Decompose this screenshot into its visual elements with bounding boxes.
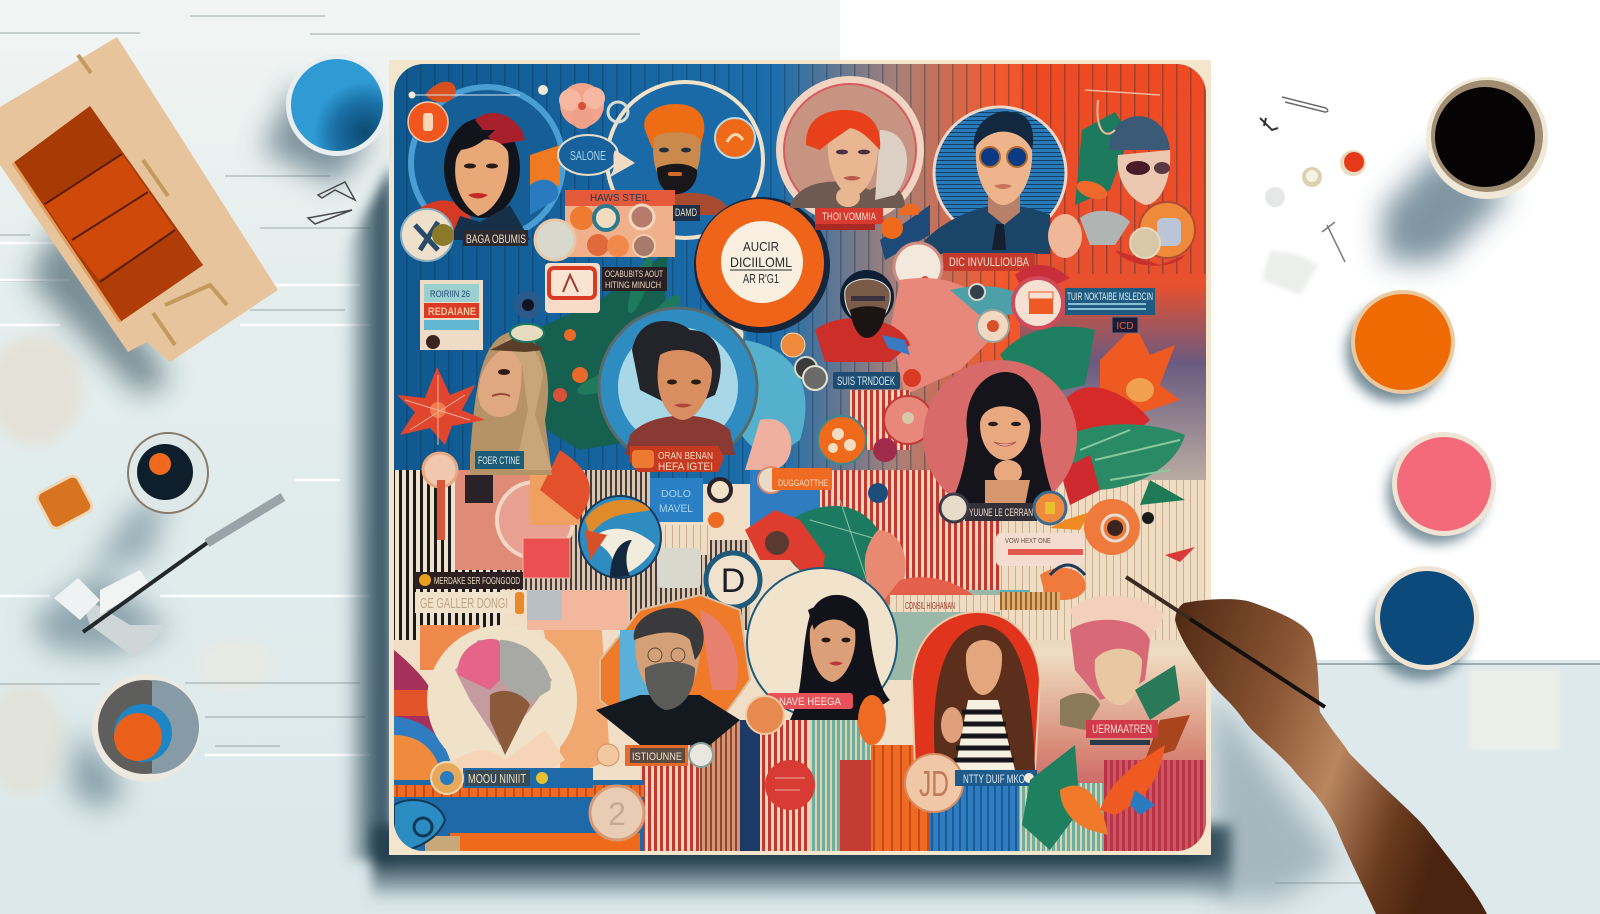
label: DAMD: DAMD (675, 207, 697, 219)
knob with orange dial (70, 674, 200, 810)
orange paint pot (1346, 290, 1455, 402)
magazine page left: ROIRIIN 26 (430, 289, 470, 299)
plate (894, 243, 942, 291)
palette tray (0, 37, 278, 395)
badge: central orange title: DICIILOML (730, 254, 792, 270)
decorative top-left sketch (408, 82, 628, 122)
portrait: pink-haired figure with feathers (1060, 596, 1190, 760)
label: ISTIOUNNE (597, 743, 713, 767)
lower-left retro bands (394, 600, 644, 851)
panel: salmon badges (535, 190, 675, 260)
label: FOER CTINE (423, 451, 524, 540)
ring pot with orange dot (90, 433, 208, 570)
panel: small orange icons (890, 565, 1086, 612)
label: ISTIOUNNE: ISTIOUNNE (632, 751, 682, 763)
label: ORAN BENAN (630, 446, 724, 473)
tool with long brush (30, 497, 283, 658)
abstract tiles and collage: DOLO (661, 489, 691, 500)
label: ORAN BENAN: ORAN BENAN (658, 451, 713, 462)
magazine page left: REDAIANE (428, 306, 476, 318)
medallion right (1115, 202, 1195, 266)
label: THOI VOMMIA: THOI VOMMIA (822, 211, 876, 223)
icon: orange badge near hat (715, 118, 755, 158)
label: BAGA OBUMIS: BAGA OBUMIS (466, 232, 526, 246)
label: MOOU NINIIT (431, 762, 593, 794)
badge: central orange title: AR R'G1 (743, 271, 779, 286)
magazine page left (420, 280, 483, 350)
red flower left (397, 367, 485, 445)
label: THOI VOMMIA (815, 208, 883, 230)
red bloom centre (745, 483, 985, 605)
label: FOER CTINE: FOER CTINE (478, 455, 520, 467)
label: TUIR NOKTAIBE MSLEDCIN: ICD (1116, 321, 1134, 332)
abstract tiles and collage: MAVEL (659, 503, 693, 515)
label: TUIR NOKTAIBE MSLEDCIN: TUIR NOKTAIBE MSLEDCIN (1067, 291, 1153, 303)
portrait: elderly person with flower hair (427, 625, 577, 775)
portrait: young person with curly hair (599, 308, 757, 466)
label: orange tag centre (758, 467, 832, 493)
orange blob with eye (1050, 499, 1195, 562)
speech bubble: SALONE (558, 135, 635, 180)
coin: red seal (765, 760, 815, 810)
poster drop shadows (345, 165, 1340, 903)
label: TUIR NOKTAIBE MSLEDCIN (1065, 288, 1155, 333)
label: DAMD (673, 205, 700, 221)
hand holding brush (1126, 577, 1487, 914)
panel: MERDAKE label stack (415, 572, 524, 614)
portrait: woman with dark hair on cream (747, 568, 897, 720)
icon: pink flower (559, 83, 605, 129)
speech bubble: SALONE: SALONE (570, 148, 606, 163)
panel: MERDAKE label stack: GE GALLER DONGI (420, 595, 508, 612)
panel: MERDAKE label stack: MERDAKE SER FOGNGOOD (434, 576, 520, 587)
portrait: woman with red headband (411, 87, 563, 240)
salmon texture middle right (850, 278, 1030, 462)
icon: orange badge top-left (408, 102, 448, 142)
label: UERMAATREN: UERMAATREN (1092, 722, 1152, 736)
badge: central orange title (694, 197, 830, 333)
icon: folder badge (1013, 265, 1070, 328)
label: OCABUBITS AOUT: HITING MINUCH (605, 280, 661, 290)
label: YUUNE LE CERRAN (940, 492, 1066, 524)
label: orange tag centre: DUGGAOTTHE (778, 478, 828, 488)
portrait: man with round sunglasses (922, 107, 1082, 258)
paint brush (1126, 577, 1325, 707)
small red and white pots with clips (1260, 97, 1366, 295)
icon: left scissors badge (401, 209, 454, 261)
label: input card (996, 533, 1084, 566)
portrait: red-haired person (776, 76, 924, 224)
label: OCABUBITS AOUT: OCABUBITS AOUT (605, 269, 663, 279)
label: NAVE HEEGA: NAVE HEEGA (779, 696, 842, 708)
portrait: man with orange hat (607, 82, 763, 238)
pink paint pot (1387, 432, 1496, 544)
icon: letter D badge (706, 553, 760, 607)
coin: number 2: 2 (608, 796, 626, 832)
green foliage centre (530, 250, 890, 590)
panel: small orange icons: CONSIL HIGHANAN (905, 601, 955, 612)
coin: initials: JD (919, 763, 949, 804)
navy paint pot (1370, 566, 1479, 680)
portrait: bearded man with glasses (596, 595, 750, 745)
icon: orange cluster badge (818, 416, 866, 464)
badge: central orange title: AUCIR (743, 239, 779, 254)
label: YUUNE LE CERRAN: YUUNE LE CERRAN (969, 507, 1033, 519)
label: DIC INVULLIOUBA (943, 253, 1035, 271)
portrait: man with black beanie (815, 270, 910, 362)
label: BAGA OBUMIS (463, 230, 528, 246)
label: ORAN BENAN: HEFA IGTEI (658, 461, 713, 473)
small orange paint square (35, 474, 94, 531)
portrait: person with cap and foliage (1074, 90, 1170, 245)
label: UERMAATREN (1086, 720, 1158, 745)
teal wave left of centre (726, 322, 818, 470)
label: MOOU NINIIT: MOOU NINIIT (468, 771, 526, 786)
poster (389, 60, 1211, 855)
portrait: woman in striped shirt on red arch (912, 612, 1040, 770)
label: SUIS TRNDOEK (803, 366, 921, 390)
label: NTTY DUIF MKO: NTTY DUIF MKO (963, 772, 1025, 786)
icon: red play card (545, 263, 600, 313)
coin: number 2 (590, 786, 644, 840)
portrait: smiling woman with dark hair (923, 360, 1077, 514)
label: DIC INVULLIOUBA: DIC INVULLIOUBA (949, 255, 1029, 269)
icon: letter D badge: D (721, 562, 745, 600)
label: NAVE HEEGA (746, 693, 886, 745)
orange fruit accent (880, 203, 930, 260)
black paint pot (1382, 77, 1548, 262)
foliage and orange flower right (1000, 325, 1185, 505)
paper clips left (308, 182, 355, 224)
label: SUIS TRNDOEK: SUIS TRNDOEK (837, 374, 895, 388)
abstract swirl globe (579, 496, 661, 578)
label: input card: VOW HEXT ONE (1005, 538, 1051, 545)
butterfly (1022, 745, 1165, 850)
blue paint pot (262, 54, 388, 185)
coin: initials (905, 754, 963, 812)
poster colour field (394, 64, 1206, 851)
label: OCABUBITS AOUT (602, 267, 667, 291)
panel: salmon badges: HAWS STEIL (590, 193, 650, 204)
abstract tiles and collage (455, 450, 731, 630)
portrait: blonde woman (470, 291, 552, 475)
label: NTTY DUIF MKO (955, 770, 1037, 786)
